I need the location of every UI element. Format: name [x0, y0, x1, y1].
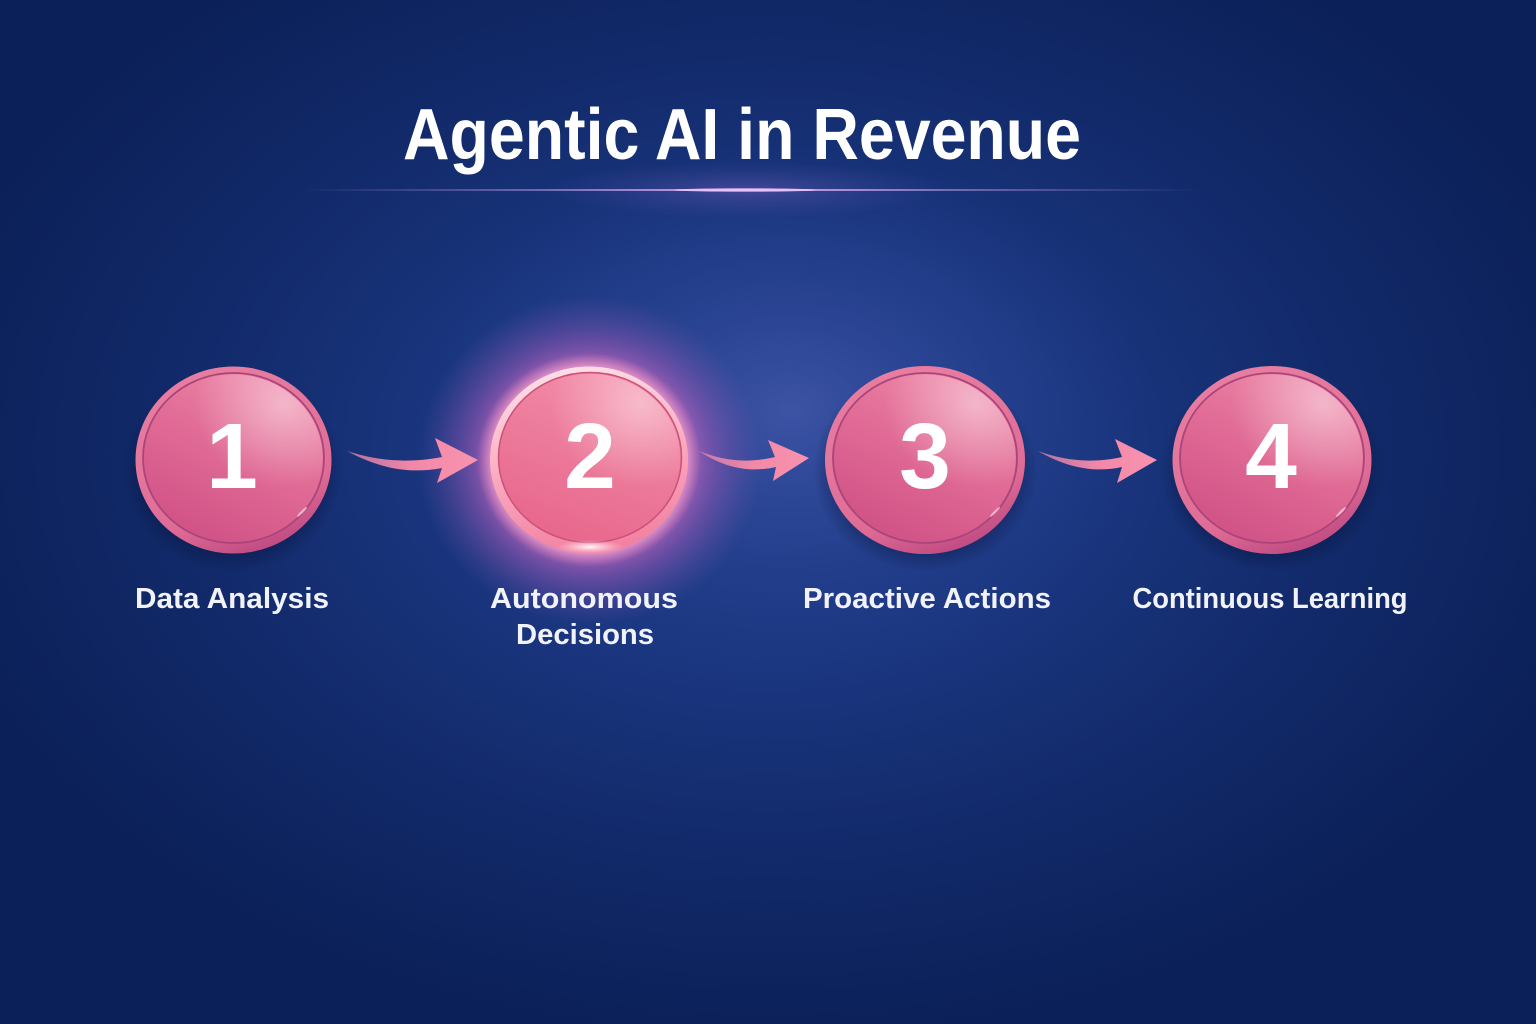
- arrow 1 to 2: [347, 438, 478, 483]
- step 2: [477, 353, 701, 651]
- step 3 disc: [813, 366, 1037, 572]
- title: Agentic AI in Revenue: [403, 95, 1081, 175]
- step 2 label: Autonomous: [490, 583, 678, 615]
- step 2 number: 2: [564, 404, 616, 508]
- step 3 number: 3: [899, 404, 951, 508]
- step 2 disc glowing: [477, 353, 701, 567]
- step 4 number: 4: [1245, 404, 1297, 508]
- arrow 3 to 4: [1038, 439, 1157, 483]
- step 1 disc: [123, 366, 343, 572]
- step 4 label: Continuous Learning: [1132, 583, 1408, 615]
- step 1 label: Data Analysis: [135, 583, 329, 615]
- step 3 label: Proactive Actions: [803, 583, 1051, 615]
- step 2 halo: [418, 295, 762, 625]
- step 2 label: [490, 583, 678, 651]
- step 3: [803, 366, 1051, 615]
- step 4 disc: [1160, 366, 1384, 572]
- step 1 number: 1: [206, 404, 258, 508]
- step 2 label: Decisions: [516, 619, 654, 651]
- title underline: [300, 162, 1200, 218]
- arrow 2 to 3: [699, 440, 809, 481]
- step 4: [1132, 366, 1408, 615]
- step 1: [123, 366, 343, 615]
